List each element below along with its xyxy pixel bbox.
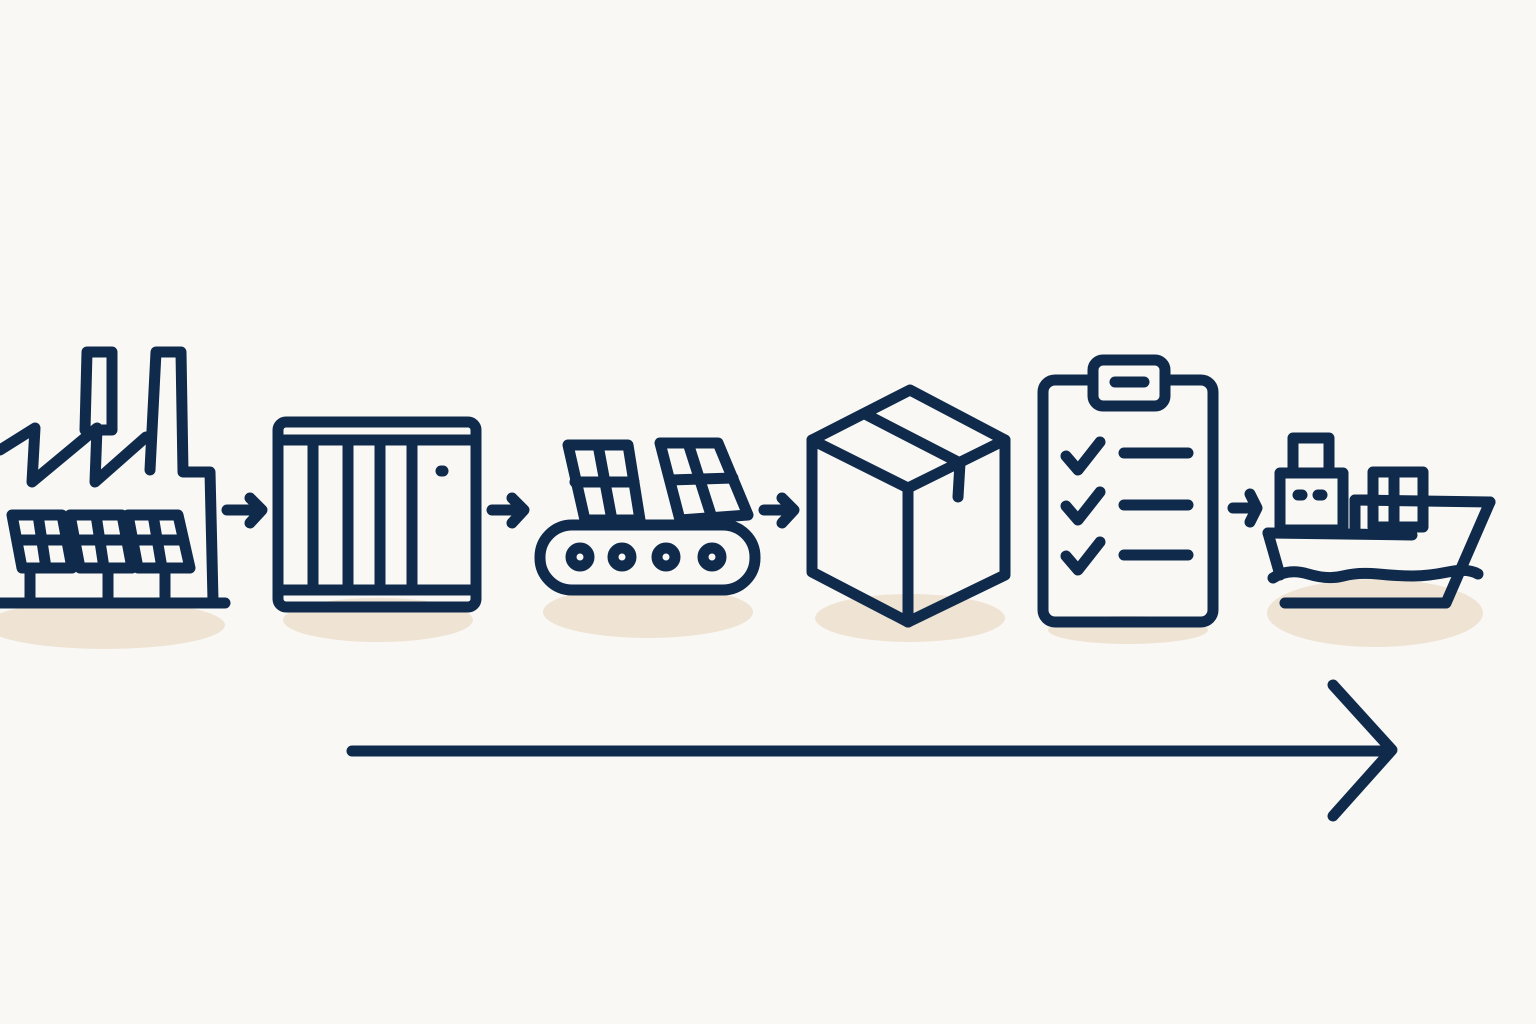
arrow: conveyor to box [764, 498, 794, 523]
icon: factory with solar panels [0, 352, 225, 603]
arrow: container to conveyor [492, 498, 524, 523]
icon: shipping container [278, 422, 476, 607]
icon: cargo ship [1268, 438, 1490, 603]
arrow: factory to container [227, 498, 262, 523]
icon: cardboard box [812, 390, 1005, 622]
icon: clipboard checklist [1043, 360, 1213, 622]
arrow: long progress arrow [352, 685, 1392, 816]
arrow: clipboard to ship [1233, 494, 1257, 522]
icon: conveyor with solar panels [540, 443, 755, 590]
